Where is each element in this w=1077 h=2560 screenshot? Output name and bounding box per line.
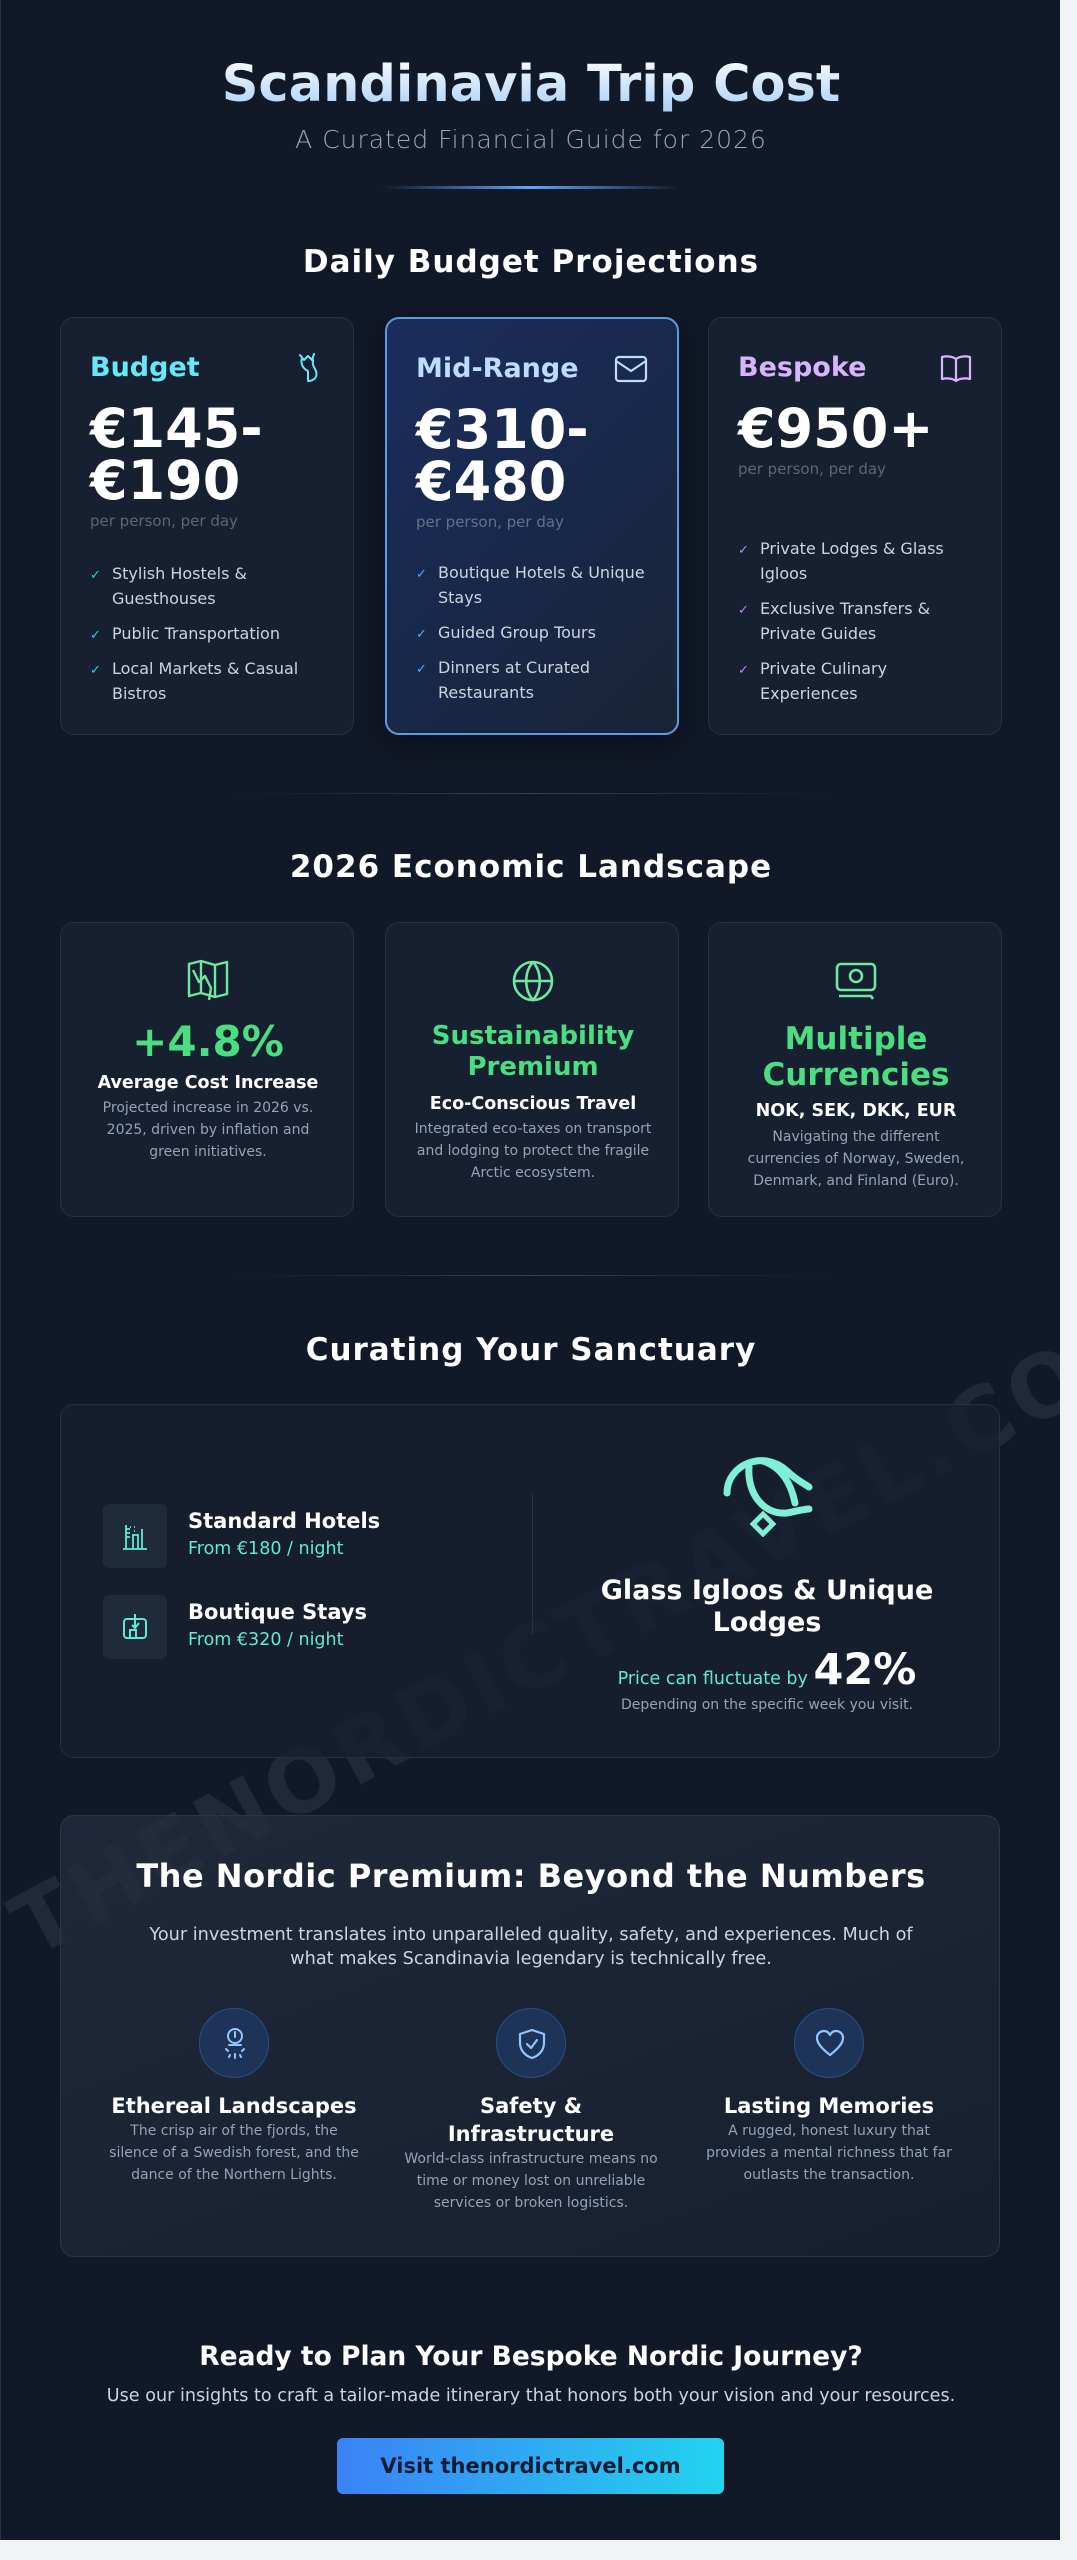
feature list: Private Lodges & Glass Igloos [760, 539, 944, 583]
cta text: Use our insights to craft a tailor-made itinerary that honors both your vision and your resources. [107, 2386, 955, 2406]
cta button: Visit thenordictravel.com [380, 2454, 681, 2478]
column: ethereal landscapes: Ethereal Landscapes [111, 2094, 357, 2118]
price: €145- [90, 397, 263, 460]
description: Projected increase in 2026 vs. 2025, driven by inflation and green initiatives. [103, 1100, 313, 1160]
item: standard hotels: From €180 / night [188, 1539, 344, 1559]
column: safety: Infrastructure [448, 2122, 614, 2146]
text: Standard Hotels [188, 1509, 380, 1533]
heading: sanctuary: Curating Your Sanctuary [306, 1332, 756, 1368]
icon: open book [940, 355, 972, 382]
title underline [381, 186, 681, 189]
feature list: ✓ [90, 628, 101, 643]
panel: sanctuary [60, 1404, 1000, 1758]
tier name: budget [90, 352, 318, 383]
panel: currencies [708, 922, 1002, 1217]
panel: mid-range tier [385, 317, 679, 735]
icon: map [188, 960, 228, 1000]
panel: sustainability [385, 922, 679, 1217]
description: Integrated eco-taxes on transport and lodging to protect the fragile Arctic ecosystem. [415, 1121, 651, 1181]
panel: sustainability: Eco-Conscious Travel [430, 1094, 636, 1114]
feature list [738, 539, 944, 703]
feature list: ✓ [416, 627, 427, 642]
highlight: glass igloos: Depending on the specific week you visit. [621, 1697, 913, 1713]
highlight: glass igloos [601, 1457, 933, 1713]
column: safety [404, 2008, 658, 2211]
heading: economic landscape: 2026 Economic Landscape [290, 849, 772, 885]
panel: cost increase: Average Cost Increase [98, 1073, 318, 1093]
stat: +4.8% [132, 1017, 284, 1066]
stat: Sustainability Premium [432, 1021, 634, 1082]
price: €310- [416, 398, 589, 461]
icon: globe [512, 960, 554, 1002]
cta heading: Ready to Plan Your Bespoke Nordic Journey? [199, 2341, 863, 2372]
feature list: ✓ [738, 543, 749, 558]
column: ethereal landscapes: The crisp air of the fjords, the silence of a Swedish forest, and the dance of the Northern Lights. [109, 2123, 359, 2183]
feature list [90, 564, 298, 703]
item: standard hotels [103, 1504, 380, 1568]
heading: Lodges [713, 1607, 821, 1638]
tier name: mid-range: Mid-Range [416, 353, 579, 384]
feature list: ✓ [416, 662, 427, 677]
icon: shield [496, 2008, 566, 2078]
feature list: Boutique Hotels & Unique Stays [438, 563, 645, 607]
feature list: ✓ [738, 663, 749, 678]
tier name: budget: Budget [90, 352, 200, 383]
icon: banknote [836, 962, 876, 1000]
price: €950+ [738, 397, 934, 460]
price: €190 [90, 449, 240, 512]
column: safety: Safety & [480, 2094, 582, 2118]
description: Navigating the different currencies of Norway, Sweden, Denmark, and Finland (Euro). [748, 1129, 964, 1189]
feature list: ✓ [90, 568, 101, 583]
icon: aurora light [199, 2008, 269, 2078]
feature list: Guided Group Tours [438, 623, 596, 642]
icon: envelope [614, 356, 648, 382]
item: boutique stays [103, 1595, 367, 1659]
feature list: ✓ [738, 603, 749, 618]
feature list: Public Transportation [112, 624, 280, 643]
cta button [337, 2438, 724, 2494]
tier name: bespoke [738, 352, 972, 383]
subtitle: A Curated Financial Guide for 2026 [295, 125, 767, 154]
feature list: Local Markets & Casual Bistros [112, 659, 298, 703]
price [415, 398, 589, 513]
feature list: ✓ [90, 663, 101, 678]
feature list: ✓ [416, 567, 427, 582]
panel: budget tier: per person, per day [90, 512, 238, 530]
column: ethereal landscapes [109, 2008, 359, 2183]
price [89, 397, 263, 512]
panel: currencies: NOK, SEK, DKK, EUR [756, 1101, 956, 1121]
panel: nordic premium [60, 1815, 1000, 2257]
price: €480 [416, 450, 566, 513]
icon: igloo [724, 1457, 812, 1537]
icon: heart [794, 2008, 864, 2078]
column: memories [706, 2008, 952, 2183]
heading: The Nordic Premium: Beyond the Numbers [136, 1857, 926, 1895]
intro text: Your investment translates into unparalleled quality, safety, and experiences. Much of what makes Scandinavia legendary is technically free. [149, 1925, 913, 1969]
heading [601, 1575, 933, 1638]
panel: cost increase [60, 922, 354, 1217]
stat: fluctuation: Price can fluctuate by 42% [618, 1645, 916, 1695]
column: memories: Lasting Memories [724, 2094, 934, 2118]
icon: cat [299, 353, 318, 382]
column: safety: World-class infrastructure means no time or money lost on unreliable services or broken logistics. [404, 2151, 658, 2211]
panel: bespoke tier [708, 317, 1002, 735]
tier name: bespoke: Bespoke [738, 352, 866, 383]
icon: building [103, 1504, 167, 1568]
feature list: Stylish Hostels & Guesthouses [112, 564, 247, 608]
feature list: Exclusive Transfers & Private Guides [760, 599, 930, 643]
feature list: Private Culinary Experiences [760, 659, 887, 703]
text: Boutique Stays [188, 1600, 367, 1624]
column: memories: A rugged, honest luxury that provides a mental richness that far outlasts the transaction. [706, 2123, 952, 2183]
panel: mid-range tier: per person, per day [416, 513, 564, 531]
title: Scandinavia Trip Cost [222, 55, 840, 114]
panel: bespoke tier: per person, per day [738, 460, 886, 478]
heading: Glass Igloos & Unique [601, 1575, 933, 1606]
stat: Multiple Currencies [763, 1021, 949, 1093]
feature list: Dinners at Curated Restaurants [438, 658, 590, 702]
panel: budget tier [60, 317, 354, 735]
item: boutique stays: From €320 / night [188, 1630, 344, 1650]
feature list [416, 563, 645, 702]
heading: daily budget: Daily Budget Projections [303, 244, 759, 280]
icon: boutique door [103, 1595, 167, 1659]
